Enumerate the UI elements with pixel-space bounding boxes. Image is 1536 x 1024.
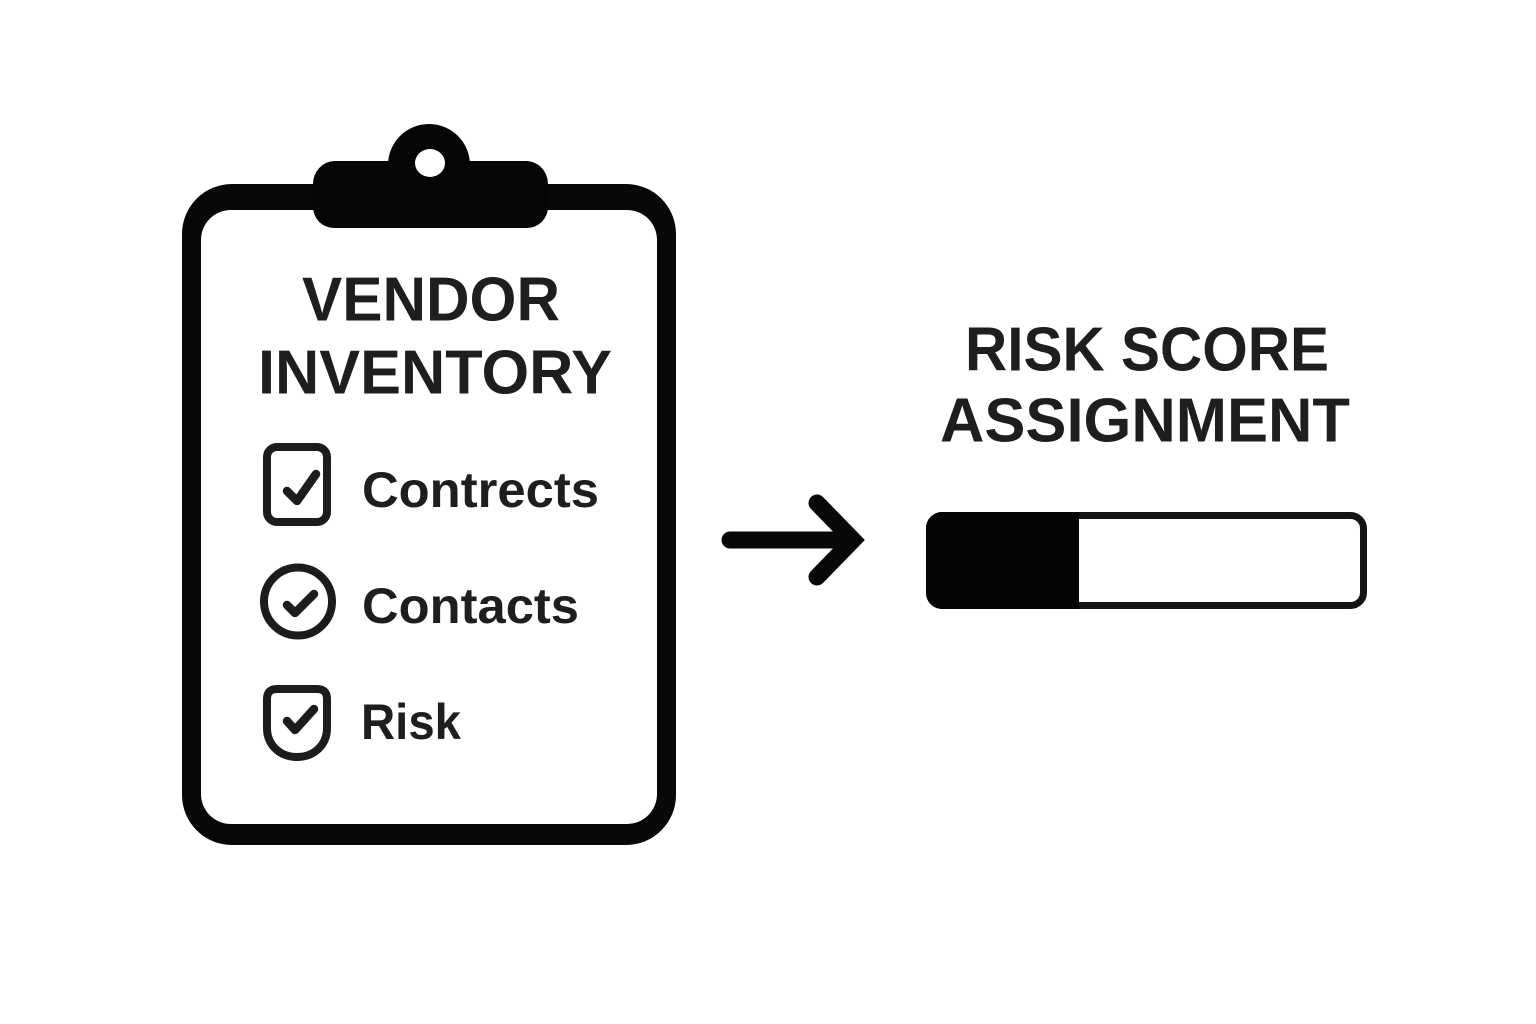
clipboard body (182, 184, 676, 845)
checklist item: risk (267, 689, 461, 757)
icon: shield check (267, 689, 327, 757)
checklist item: contracts (267, 447, 599, 522)
arrow (730, 503, 853, 577)
heading: risk score assignment (940, 316, 1350, 456)
checklist item: contacts (264, 568, 579, 636)
panel: vendor inventory clipboard (182, 124, 676, 845)
heading: risk score assignment: ASSIGNMENT (940, 386, 1350, 456)
checklist item: risk: Risk (361, 694, 461, 750)
clipboard clip (313, 124, 548, 228)
risk score progress bar (926, 512, 1364, 609)
bar track (930, 516, 1364, 606)
bar fill (926, 512, 1079, 609)
icon: document check (267, 447, 327, 522)
heading: vendor inventory: INVENTORY (258, 338, 612, 408)
heading: risk score assignment: RISK SCORE (965, 316, 1329, 384)
checklist item: contacts: Contacts (362, 578, 579, 634)
heading: vendor inventory (258, 266, 612, 408)
heading: vendor inventory: VENDOR (302, 266, 560, 334)
icon: circle check (264, 568, 332, 636)
checklist item: contracts: Contrects (362, 462, 599, 518)
